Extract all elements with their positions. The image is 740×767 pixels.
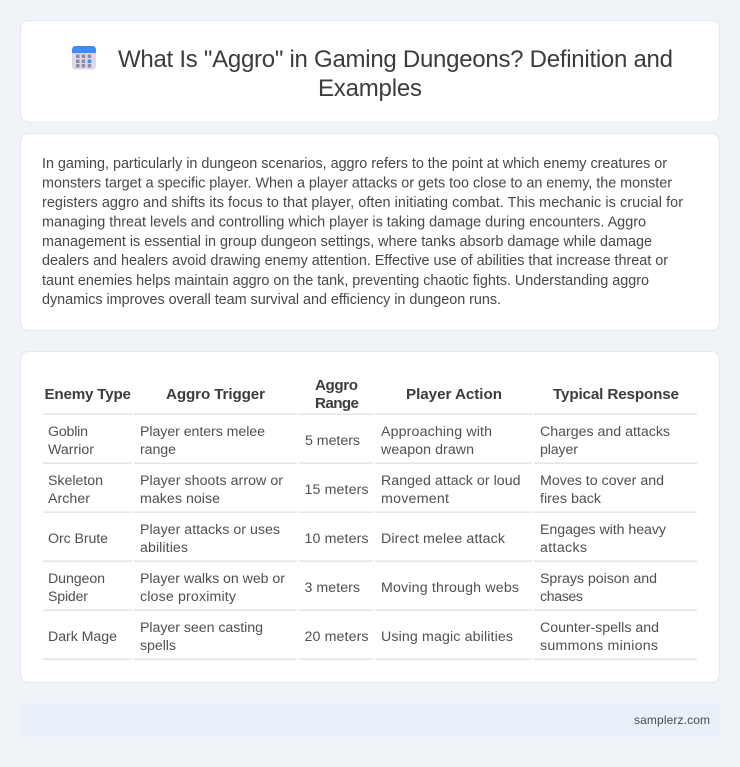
- table header row: [44, 377, 679, 412]
- table row: Orc Brute: Engages with heavy: [540, 522, 667, 538]
- table row: Dungeon Spider: chases: [540, 589, 583, 605]
- table row: Goblin Warrior: 5 meters: [305, 433, 360, 449]
- table header row: Range: [315, 395, 359, 412]
- table row: Orc Brute: Direct melee attack: [381, 531, 506, 547]
- text block: definition paragraph: registers aggro and shifts its focus to that player, often initiating combat. This mechanic is crucial for: [42, 195, 683, 211]
- icon: calendar: [72, 46, 96, 70]
- table row: Dark Mage: spells: [140, 638, 176, 654]
- table row: Skeleton Archer: [48, 473, 664, 507]
- table header row: Aggro Trigger: [166, 386, 265, 403]
- footer bar: samplerz.com: [634, 713, 710, 727]
- table header row: Enemy Type: [44, 386, 131, 403]
- table row: Skeleton Archer: Ranged attack or loud: [381, 473, 520, 489]
- table header row: Player Action: [406, 386, 502, 403]
- table row: Dungeon Spider: Spider: [48, 589, 88, 605]
- table row: Dark Mage: Dark Mage: [48, 629, 117, 645]
- text block: definition paragraph: management is essential in group dungeon settings, where tanks absorb damage while damage: [42, 234, 652, 250]
- title: What Is "Aggro" in Gaming Dungeons? Definition and: [118, 46, 673, 73]
- text block: definition paragraph: dynamics improves overall team survival and efficiency in dungeon runs.: [42, 292, 501, 308]
- table row: Skeleton Archer: Moves to cover and: [540, 473, 664, 489]
- table row: Dungeon Spider: 3 meters: [304, 580, 360, 596]
- table row: Goblin Warrior: Goblin: [48, 424, 88, 440]
- table row: Dark Mage: [48, 620, 659, 654]
- text block: definition paragraph: dealers and healers avoid drawing enemy attention. Effective use of abilities that increase threat or: [42, 253, 668, 269]
- panel: enemy aggro table: [20, 352, 720, 682]
- table row: Orc Brute: Orc Brute: [48, 531, 108, 547]
- table row: Orc Brute: Player attacks or uses: [140, 522, 280, 538]
- table row: Dark Mage: Counter-spells and: [540, 620, 659, 636]
- table row: Goblin Warrior: Player enters melee: [140, 424, 265, 440]
- table row: Skeleton Archer: makes noise: [140, 491, 220, 507]
- table header row: Typical Response: [553, 386, 679, 403]
- table row: Orc Brute: attacks: [540, 540, 587, 556]
- table row: Orc Brute: [48, 522, 667, 556]
- table row: Goblin Warrior: Approaching with: [381, 424, 492, 440]
- table row: Skeleton Archer: 15 meters: [304, 482, 368, 498]
- table row: Dungeon Spider: [48, 571, 657, 605]
- table row: Dungeon Spider: Player walks on web or: [140, 571, 285, 587]
- title: Examples: [318, 75, 422, 102]
- table row: Goblin Warrior: [48, 424, 670, 458]
- table row: Goblin Warrior: player: [540, 442, 578, 458]
- table row: Goblin Warrior: range: [140, 442, 176, 458]
- table row: Dungeon Spider: Sprays poison and: [540, 571, 657, 587]
- panel: definition: [20, 134, 720, 330]
- panel: title card: [20, 20, 720, 122]
- text block: definition paragraph: managing threat levels and controlling which player is taking damage during encounters. Aggro: [42, 214, 646, 230]
- table header row: Aggro: [315, 377, 358, 394]
- table row: Dark Mage: Using magic abilities: [381, 629, 513, 645]
- table row: Dungeon Spider: Dungeon: [48, 571, 105, 587]
- table row: Skeleton Archer: fires back: [540, 491, 602, 507]
- table row: Dark Mage: summons minions: [540, 638, 658, 654]
- table row: Skeleton Archer: Skeleton: [48, 473, 103, 489]
- table row: Orc Brute: 10 meters: [304, 531, 368, 547]
- text block: definition paragraph: In gaming, particularly in dungeon scenarios, aggro refers to the point at which enemy creatures or: [42, 156, 667, 172]
- title: [118, 46, 673, 102]
- table row: Dungeon Spider: Moving through webs: [381, 580, 519, 596]
- table row: Dark Mage: 20 meters: [304, 629, 368, 645]
- table row: Dark Mage: Player seen casting: [140, 620, 263, 636]
- table row: Goblin Warrior: Charges and attacks: [540, 424, 670, 440]
- table row: Skeleton Archer: movement: [381, 491, 449, 507]
- text block: definition paragraph: taunt enemies helps maintain aggro on the tank, preventing chaotic fights. Understanding aggro: [42, 273, 649, 289]
- table row: Skeleton Archer: Player shoots arrow or: [140, 473, 283, 489]
- table row: Goblin Warrior: Warrior: [48, 442, 94, 458]
- footer bar: [20, 703, 720, 737]
- text block: definition paragraph: [42, 156, 683, 308]
- table row: Orc Brute: abilities: [140, 540, 188, 556]
- table row: Dungeon Spider: close proximity: [140, 589, 237, 605]
- table row: Goblin Warrior: weapon drawn: [380, 442, 474, 458]
- table row: Skeleton Archer: Archer: [48, 491, 90, 507]
- text block: definition paragraph: monsters target a specific player. When a player attacks or gets too close to an enemy, the monster: [42, 176, 672, 192]
